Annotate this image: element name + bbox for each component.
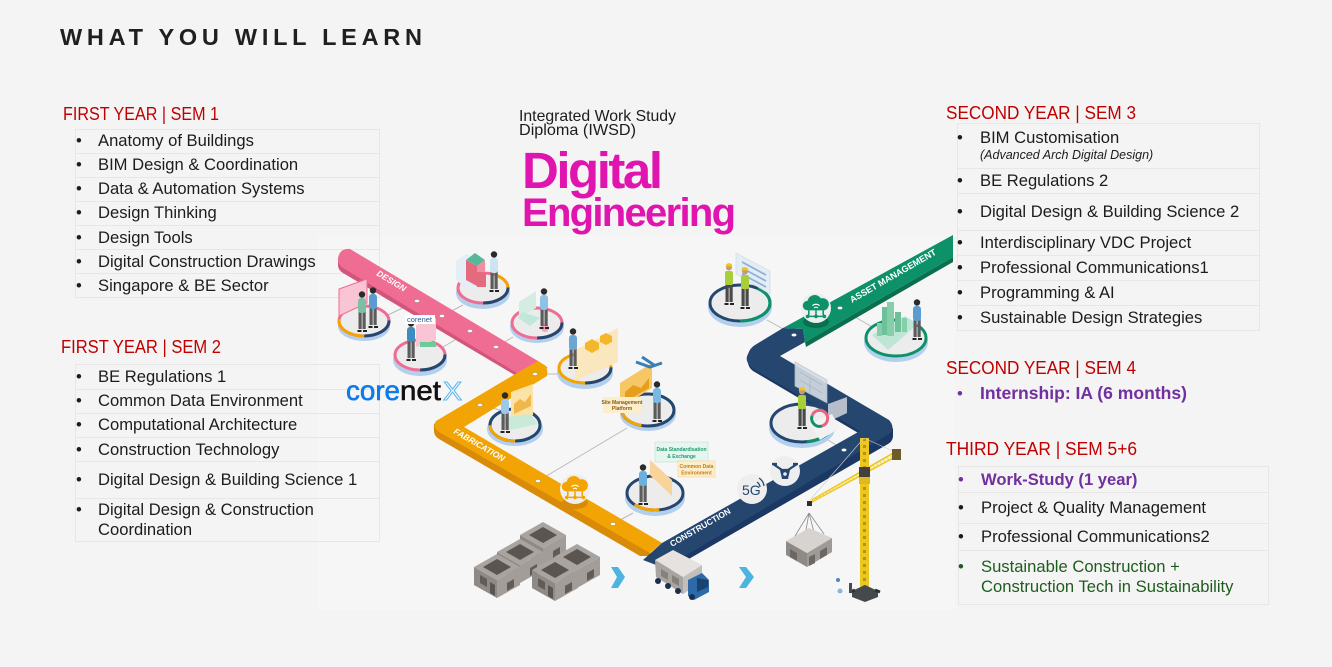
arrow: left chevron [611, 567, 625, 588]
course list: sem 2: • [76, 440, 82, 459]
course list: sem 5+6: Project & Quality Management [981, 498, 1206, 517]
tag: common data environment: Environment [681, 470, 712, 476]
delivery truck [655, 550, 709, 600]
icon: 5G [737, 474, 767, 504]
tag: data standardisation and exchange [655, 442, 708, 462]
station: asset inspection [708, 253, 772, 327]
course list: sem 1: • [76, 228, 82, 247]
course list: sem 1: • [76, 203, 82, 222]
image backdrop [318, 235, 955, 610]
course list: sem 2: • [76, 415, 82, 434]
course list: sem 3: Interdisciplinary VDC Project [980, 233, 1192, 252]
icon: orange wifi cloud [560, 474, 590, 509]
course list: sem 3: • [957, 258, 963, 277]
course list: sem 2: Common Data Environment [98, 391, 303, 410]
course list: sem 5+6: Construction Tech in Sustainability [981, 577, 1234, 596]
station: fabrication desk [487, 384, 543, 446]
course list: sem 1: • [76, 155, 82, 174]
tower crane [807, 438, 901, 602]
panel: third year sem 5+6 [946, 439, 1269, 604]
precast modules stack [474, 522, 600, 601]
course list: sem 1: • [76, 179, 82, 198]
station: construction dashboard [769, 362, 847, 448]
internship item: • [957, 384, 963, 403]
panel: second year sem 4 [946, 358, 1187, 403]
station: data standardisation [625, 442, 715, 516]
label: fabrication: FABRICATION [452, 426, 507, 464]
road nodes [414, 300, 846, 526]
course list: sem 3: Programming & AI [980, 283, 1115, 302]
course list: sem 2: Construction Technology [98, 440, 280, 459]
course list: sem 1: Anatomy of Buildings [98, 131, 254, 150]
chart: digital engineering workflow illustration [338, 235, 953, 602]
course list: sem 3: • [957, 308, 963, 327]
tag: site management platform: Platform [612, 406, 633, 412]
course list: sem 3: Sustainable Design Strategies [980, 308, 1202, 327]
heading: digital: Digital [522, 142, 663, 199]
course list: sem 2: Coordination [98, 520, 192, 539]
tag: corenet: corenet [407, 315, 433, 324]
panel: first year sem 1 [63, 104, 380, 298]
course list: sem 1: Data & Automation Systems [98, 179, 305, 198]
heading: first year sem 1: FIRST YEAR | SEM 1 [63, 104, 219, 124]
programme subtitle line 2: Diploma (IWSD) [519, 122, 636, 139]
logo: corenet x: X [443, 376, 462, 406]
course list: sem 3 [957, 128, 1239, 327]
hoisted module [786, 513, 832, 567]
course list: sem 1: • [76, 276, 82, 295]
course list: sem 1 [76, 131, 316, 295]
course list: sem 5+6: • [958, 498, 964, 517]
station: smart city model [864, 299, 928, 362]
label: construction: CONSTRUCTION [668, 506, 732, 549]
panel: second year sem 3 [946, 103, 1260, 330]
course list: sem 2: • [76, 391, 82, 410]
course list: sem 2: • [76, 367, 82, 386]
road: asset management [783, 235, 953, 347]
course list: sem 1: Design Tools [98, 228, 193, 247]
station: site management platform [601, 357, 676, 431]
road: fabrication [434, 361, 662, 556]
icon: green wifi cloud [801, 293, 831, 328]
tag: common data environment [678, 461, 715, 477]
course list: sem 5+6: Work-Study (1 year) [981, 470, 1137, 489]
course list: sem 2: Computational Architecture [98, 415, 297, 434]
logo: corenet x: net [400, 375, 441, 406]
course list: sem 5+6: • [958, 527, 964, 546]
course list: sem 5+6 [958, 470, 1234, 596]
programme subtitle: Integrated Work Study [519, 108, 676, 125]
course list: sem 3: BIM Customisation [980, 128, 1119, 147]
tag: common data environment: Common Data [680, 464, 714, 470]
icon: drone [770, 456, 800, 486]
course list: sem 2: Digital Design & Building Science 1 [98, 470, 357, 489]
course list: sem 3: • [957, 283, 963, 302]
course list: sem 1: BIM Design & Coordination [98, 155, 298, 174]
course list: sem 3: • [957, 128, 963, 147]
logo: corenet x: core [346, 375, 400, 406]
heading: second year sem 4: SECOND YEAR | SEM 4 [946, 358, 1136, 378]
course list: sem 2: • [76, 470, 82, 489]
course list: sem 1: Design Thinking [98, 203, 217, 222]
tag: site management platform: Site Management [601, 400, 643, 406]
course list: sem 2: Digital Design & Construction [98, 500, 314, 519]
connectors [388, 301, 872, 524]
label: asset management: ASSET MANAGEMENT [848, 247, 938, 305]
course list: sem 1: • [76, 131, 82, 150]
course list: sem 3: • [957, 171, 963, 190]
course list: sem 5+6: • [958, 557, 964, 576]
course list: sem 1: Singapore & BE Sector [98, 276, 269, 295]
course list: sem 3: • [957, 202, 963, 221]
course list: sem 5+6: Sustainable Construction + [981, 557, 1180, 576]
heading: third year sem 5+6: THIRD YEAR | SEM 5+6 [946, 439, 1137, 459]
heading: engineering: Engineering [522, 191, 736, 235]
station: process planning [557, 328, 618, 389]
course list: sem 2 [76, 367, 357, 539]
road: construction and upper link [643, 328, 893, 571]
tag: data standardisation and exchange: & Exchange [667, 454, 696, 460]
course list: sem 2: BE Regulations 1 [98, 367, 226, 386]
panel: programme title [519, 108, 736, 235]
tag: site management platform [601, 397, 643, 413]
icon: 5G: 5G [742, 482, 761, 498]
course list: sem 1: Digital Construction Drawings [98, 252, 316, 271]
station: workstation [510, 288, 564, 343]
icon: drone [636, 357, 662, 367]
course list: sem 1: • [76, 252, 82, 271]
internship item: Internship: IA (6 months) [980, 383, 1187, 403]
station: building design [456, 251, 510, 309]
course list: sem 5+6: Professional Communications2 [981, 527, 1210, 546]
course list: sem 3: BE Regulations 2 [980, 171, 1108, 190]
course list: sem 3: Professional Communications1 [980, 258, 1209, 277]
panel: first year sem 2 [61, 337, 380, 542]
heading: first year sem 2: FIRST YEAR | SEM 2 [61, 337, 221, 357]
road: design [338, 249, 548, 377]
course list: sem 3: (Advanced Arch Digital Design) [980, 148, 1153, 162]
heading: second year sem 3: SECOND YEAR | SEM 3 [946, 103, 1136, 123]
course list: sem 5+6: • [958, 470, 964, 489]
title: WHAT YOU WILL LEARN [60, 24, 422, 50]
course list: sem 3: Digital Design & Building Science 2 [980, 202, 1239, 221]
station: design review [338, 279, 390, 341]
course list: sem 3: • [957, 233, 963, 252]
arrow: right chevron [739, 567, 754, 588]
station: design desk with corenet tag [393, 315, 447, 376]
course list: sem 2: • [76, 500, 82, 519]
logo: corenet x [346, 375, 462, 406]
label: design: DESIGN [375, 268, 409, 294]
tag: data standardisation and exchange: Data Standardisation [656, 447, 707, 453]
